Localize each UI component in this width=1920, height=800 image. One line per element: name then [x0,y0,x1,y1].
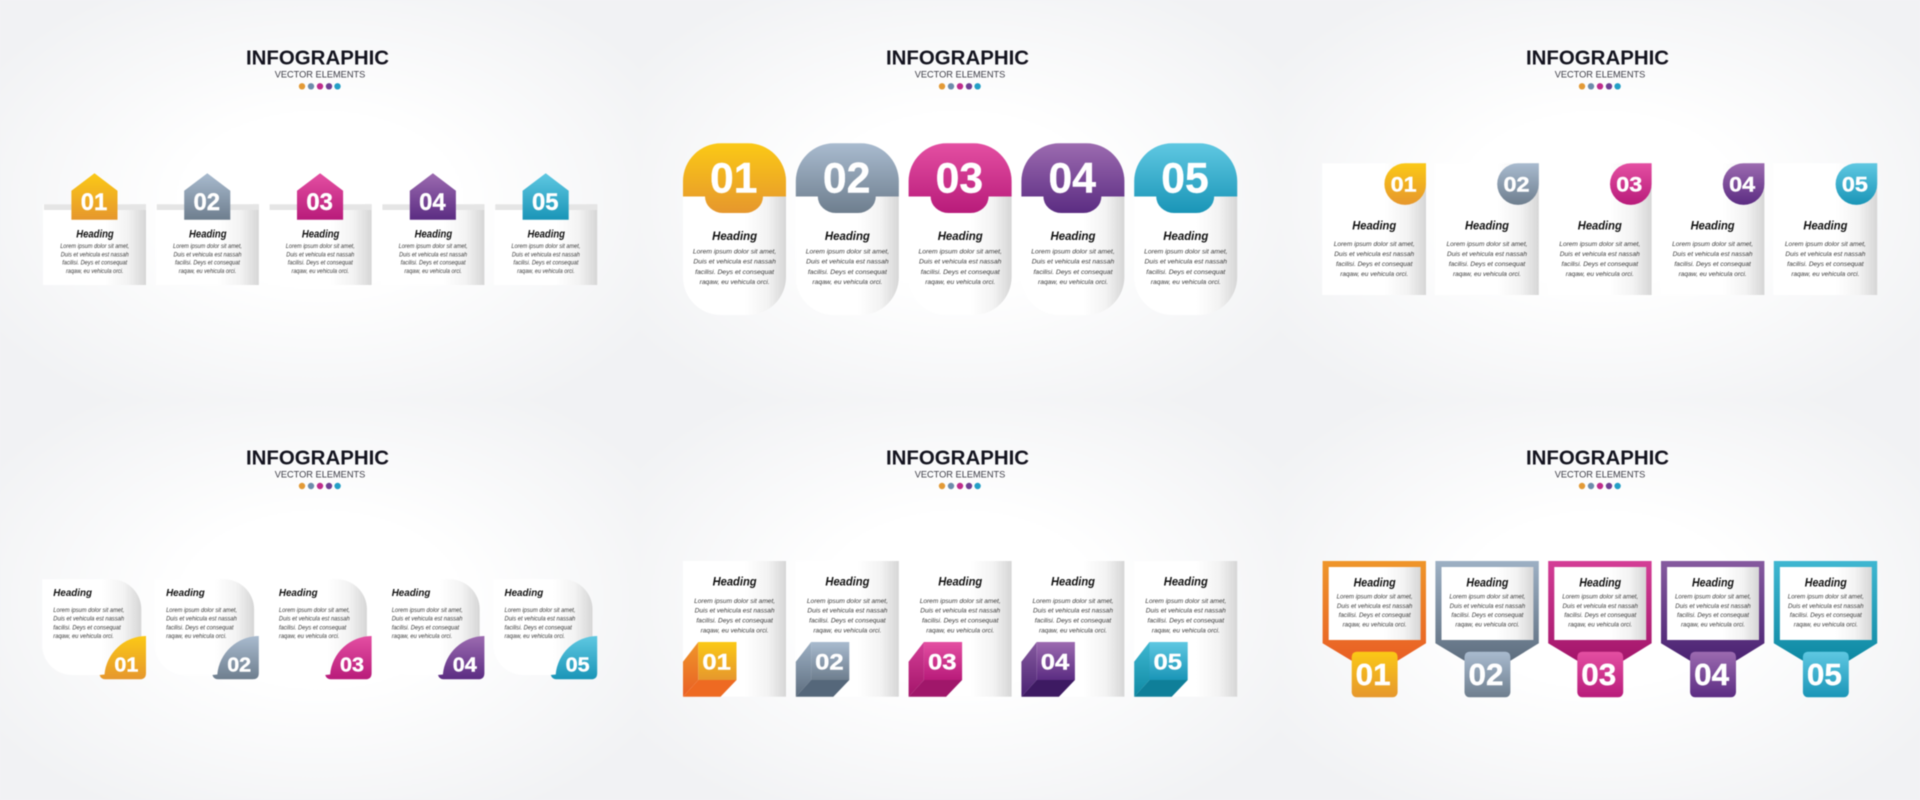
panel 4 card 01 [42,579,146,679]
panel 1 card 01: 01 [81,189,107,216]
panel 3 card 04 [1661,163,1764,295]
panel 6 card 01: Duis et vehicula est nassah [1337,603,1413,610]
panel 6 card 04: raqaw, eu vehicula orci. [1681,622,1745,628]
panel 3 card 02: raqaw, eu vehicula orci. [1453,271,1521,278]
panel 1 card 01 [43,173,146,285]
panel 4 card 03: facilisi. Deys et consequat [279,625,347,631]
panel 3 card 04: 04 [1729,173,1755,197]
panel 3 card 01: raqaw, eu vehicula orci. [1340,271,1408,278]
panel 1 card 02: 02 [194,189,220,216]
panel 5 card 02: 02 [815,649,844,674]
panel 2: rounded capsules [683,47,1237,315]
panel 6 card 03: facilisi. Deys et consequat [1564,612,1636,619]
panel 2 card 02: Lorem ipsum dolor sit amet, [806,248,889,255]
panel 3 card 01: Lorem ipsum dolor sit amet, [1334,241,1415,248]
panel 6 card 04: Lorem ipsum dolor sit amet, [1675,593,1751,600]
panel 3 card 03: facilisi. Deys et consequat [1562,261,1639,268]
panel 1 card 03: Heading [302,228,340,240]
panel 3 card 03 [1548,163,1652,295]
panel 2 card 05: raqaw, eu vehicula orci. [1151,279,1221,286]
panel 6 card 02: 02 [1468,658,1503,692]
panel 3 card 02: Heading [1465,218,1510,232]
panel 2 card 04: raqaw, eu vehicula orci. [1038,279,1108,286]
panel 2 card 03 [909,143,1012,315]
panel 6 card 02: raqaw, eu vehicula orci. [1455,622,1519,628]
panel 2 card 01: Duis et vehicula est nassah [693,258,776,266]
panel 4 card 04: raqaw, eu vehicula orci. [392,634,452,640]
panel 4 card 05: Lorem ipsum dolor sit amet, [505,608,576,614]
panel 3 card 05 [1773,163,1877,295]
panel 2 card 03: Lorem ipsum dolor sit amet, [918,248,1002,255]
panel 2 card 05 [1134,143,1237,315]
panel 4: leaf tags [42,447,597,679]
panel 6 card 02: Heading [1466,578,1508,590]
panel 1 card 01: raqaw, eu vehicula orci. [66,269,123,275]
panel 5 card 01 [683,561,786,697]
panel 1 card 01: Heading [76,228,114,240]
panel 6 card 02: Lorem ipsum dolor sit amet, [1449,593,1525,600]
panel 6 title: VECTOR ELEMENTS [1555,469,1645,480]
panel 4 card 05: facilisi. Deys et consequat [505,625,572,631]
panel 3 card 02: facilisi. Deys et consequat [1449,261,1526,268]
panel 4 title: INFOGRAPHIC [246,447,389,469]
panel 1 card 04: raqaw, eu vehicula orci. [404,269,462,275]
panel 2 card 02: Duis et vehicula est nassah [806,258,889,266]
panel 4 card 02: Duis et vehicula est nassah [166,617,238,623]
panel 6 card 04: 04 [1694,658,1729,692]
panel 1 card 02 [156,173,259,285]
panel 4 card 05: raqaw, eu vehicula orci. [505,634,565,640]
panel 4 card 05: Duis et vehicula est nassah [505,617,576,623]
panel 6 card 05: facilisi. Deys et consequat [1790,612,1862,619]
panel 3 card 04: Lorem ipsum dolor sit amet, [1672,241,1753,248]
panel 5 card 04: Duis et vehicula est nassah [1033,608,1113,614]
panel 4 card 03: raqaw, eu vehicula orci. [279,634,339,640]
panel 5 card 01: raqaw, eu vehicula orci. [701,628,769,634]
panel 5 card 04: Heading [1051,575,1096,589]
panel 5 card 05: facilisi. Deys et consequat [1148,618,1225,624]
panel 2 card 04: Duis et vehicula est nassah [1032,258,1114,266]
panel 2 card 01: facilisi. Deys et consequat [695,269,775,276]
panel 5 card 03: raqaw, eu vehicula orci. [926,628,994,634]
panel 5 card 03: Lorem ipsum dolor sit amet, [920,598,1001,605]
panel 4 card 01: 01 [114,654,138,677]
panel 2 card 04: Lorem ipsum dolor sit amet, [1031,248,1115,255]
panel 2 card 01 [683,143,786,315]
panel 1 title: VECTOR ELEMENTS [275,69,365,80]
panel 1 card 04: Lorem ipsum dolor sit amet, [399,244,468,250]
panel 1 title [246,47,389,90]
panel 6 card 01: raqaw, eu vehicula orci. [1343,622,1407,628]
panel 4 card 01: Lorem ipsum dolor sit amet, [53,608,124,614]
panel 6 title [1526,447,1669,489]
panel 4 card 02: Lorem ipsum dolor sit amet, [166,608,237,614]
panel 2 card 02: facilisi. Deys et consequat [808,269,888,276]
panel 2 card 05: Duis et vehicula est nassah [1145,258,1227,266]
panel 2 card 05: Heading [1163,229,1209,243]
panel 2 card 01: 01 [710,154,758,202]
panel 5 card 02: raqaw, eu vehicula orci. [813,628,882,634]
panel 5 card 02: Heading [825,575,870,589]
panel 4 card 02: Heading [166,587,205,599]
panel 2 card 02: 02 [823,154,870,202]
panel 2 card 03: facilisi. Deys et consequat [921,269,1001,276]
panel 5 card 05: Heading [1164,575,1208,589]
panel 2 card 05: 05 [1161,154,1209,202]
panel 3 card 05: 05 [1842,173,1868,197]
panel 4 card 02: facilisi. Deys et consequat [166,625,234,631]
panel 4 card 02 [155,579,259,679]
panel 2 card 04: facilisi. Deys et consequat [1033,269,1114,276]
panel 2 card 01: Lorem ipsum dolor sit amet, [693,248,776,255]
panel 5 card 03 [909,561,1012,697]
panel 6 card 05: raqaw, eu vehicula orci. [1794,622,1858,628]
panel 5 card 02: Lorem ipsum dolor sit amet, [807,598,888,605]
panel 6 card 01: 01 [1356,658,1391,692]
panel 4 card 03 [268,579,372,679]
panel 4 card 01: Duis et vehicula est nassah [53,617,125,623]
panel 2 card 03: raqaw, eu vehicula orci. [925,279,995,286]
panel 2 card 03: Heading [938,229,983,243]
panel 6 card 04: Heading [1692,578,1734,590]
panel 5 card 05: Duis et vehicula est nassah [1146,608,1226,614]
panel 6 card 04 [1661,561,1764,697]
panel 1 card 05: 05 [532,189,558,216]
panel 2 card 02: Heading [825,229,871,243]
panel 2 card 05: Lorem ipsum dolor sit amet, [1144,248,1228,255]
panel 1 card 01: Duis et vehicula est nassah [61,252,129,258]
panel 3 card 02: Lorem ipsum dolor sit amet, [1446,241,1528,248]
panel 5 card 05: 05 [1154,649,1182,674]
panel 2 card 03: 03 [936,154,983,202]
panel 6 card 01 [1323,561,1426,697]
panel 1 card 03: facilisi. Deys et consequat [288,261,353,267]
panel 5 card 01: 01 [702,649,731,674]
panel 4 card 02: raqaw, eu vehicula orci. [166,634,227,640]
panel 6 card 02: Duis et vehicula est nassah [1450,603,1526,610]
panel 3 card 05: Lorem ipsum dolor sit amet, [1785,241,1866,248]
panel 6: framed shields [1323,447,1877,697]
panel 6 card 03: Heading [1579,578,1621,590]
panel 4 card 03: Duis et vehicula est nassah [279,617,350,623]
panel 5 card 01: facilisi. Deys et consequat [696,618,774,624]
panel 1 card 04: Heading [415,228,452,240]
panel 5 card 03: Heading [938,575,983,589]
panel 6 card 04: facilisi. Deys et consequat [1677,612,1749,619]
panel 3 card 01: Duis et vehicula est nassah [1334,251,1415,258]
panel 1 card 03: raqaw, eu vehicula orci. [292,269,349,275]
panel 2 card 04: 04 [1048,154,1096,202]
panel 4 card 01: raqaw, eu vehicula orci. [53,634,114,640]
panel 1 card 01: facilisi. Deys et consequat [62,261,128,267]
panel 3 card 01: 01 [1391,173,1417,197]
panel 5 card 02: Duis et vehicula est nassah [807,608,888,614]
panel 5 card 01: Heading [713,575,757,589]
panel 5 card 03: Duis et vehicula est nassah [920,608,1001,614]
panel 6 card 03: 03 [1581,658,1616,692]
panel 5 card 04: 04 [1041,649,1070,674]
panel 2 card 02 [796,143,899,315]
panel 6 card 03 [1548,561,1652,697]
panel 1: pentagon tabs [43,47,597,285]
panel 6 card 01: facilisi. Deys et consequat [1339,612,1411,619]
panel 4 card 04: 04 [453,654,477,677]
panel 6 card 02: facilisi. Deys et consequat [1451,612,1524,619]
panel 1 card 03: Duis et vehicula est nassah [286,252,355,258]
panel 4 card 05 [493,579,597,679]
panel 5 title: INFOGRAPHIC [886,447,1029,469]
panel 4 card 05: Heading [505,587,544,599]
panel 2 card 01: raqaw, eu vehicula orci. [700,279,770,286]
panel 5 card 03: 03 [928,649,956,674]
panel 2 card 05: facilisi. Deys et consequat [1146,269,1226,276]
panel 1 card 02: raqaw, eu vehicula orci. [179,269,236,275]
panel 3 card 04: raqaw, eu vehicula orci. [1679,271,1747,278]
panel 3 card 02: Duis et vehicula est nassah [1447,251,1527,258]
panel 1 card 02: facilisi. Deys et consequat [175,261,240,267]
panel 1 card 04: Duis et vehicula est nassah [399,252,468,258]
panel 1 card 02: Duis et vehicula est nassah [174,252,242,258]
panel 3 card 02 [1435,163,1539,295]
panel 4 card 03: 03 [340,654,364,677]
panel 5 card 04 [1021,561,1124,697]
panel 3 title: INFOGRAPHIC [1526,47,1669,69]
panel 6 card 01: Heading [1354,578,1396,590]
panel 1 card 05: raqaw, eu vehicula orci. [517,269,575,275]
panel 1 card 03 [269,173,372,285]
panel 1 card 02: Heading [189,228,227,240]
panel 2 card 01: Heading [712,229,758,243]
panel 1 card 04 [381,173,484,285]
panel 3 card 04: Duis et vehicula est nassah [1673,251,1753,258]
panel 3 card 05: Heading [1803,218,1848,232]
panel 5: 3D blocks [683,447,1237,697]
panel 3 card 02: 02 [1503,173,1530,197]
panel 3 card 03: raqaw, eu vehicula orci. [1566,271,1634,278]
panel 3 card 03: 03 [1616,173,1642,197]
panel 4 card 04: facilisi. Deys et consequat [392,625,459,631]
panel 3 card 01: facilisi. Deys et consequat [1336,261,1414,268]
panel 5 card 05: raqaw, eu vehicula orci. [1152,628,1220,634]
panel 6 card 05: 05 [1807,658,1842,692]
panel 3 card 04: facilisi. Deys et consequat [1674,261,1752,268]
panel 3 card 03: Lorem ipsum dolor sit amet, [1559,241,1640,248]
panel 2 card 04 [1021,143,1124,315]
panel 1 card 01: Lorem ipsum dolor sit amet, [60,244,129,250]
panel 1 card 05: Lorem ipsum dolor sit amet, [511,244,580,250]
panel 1 card 03: 03 [306,189,333,216]
panel 2 title [886,47,1029,90]
panel 3 card 05: facilisi. Deys et consequat [1787,261,1865,268]
panel 6 card 01: Lorem ipsum dolor sit amet, [1337,593,1413,600]
panel 3 title: VECTOR ELEMENTS [1555,69,1645,80]
panel 4 card 01: Heading [53,587,93,599]
panel 4 card 04 [381,579,484,679]
panel 4 card 04: Lorem ipsum dolor sit amet, [392,608,463,614]
panel 4 title: VECTOR ELEMENTS [275,469,365,480]
panel 6 card 05: Duis et vehicula est nassah [1788,603,1864,610]
panel 5 card 03: facilisi. Deys et consequat [922,618,1000,624]
panel 2 title: INFOGRAPHIC [886,47,1029,69]
panel 4 title [246,447,389,489]
panel 5 card 05 [1134,561,1237,697]
panel 4 card 01: facilisi. Deys et consequat [53,625,121,631]
panel 5 card 04: Lorem ipsum dolor sit amet, [1032,598,1114,605]
panel 3 card 05: raqaw, eu vehicula orci. [1791,271,1860,278]
panel 1 card 02: Lorem ipsum dolor sit amet, [173,244,242,250]
panel 2 card 03: Duis et vehicula est nassah [919,258,1002,266]
panel 3 title [1526,47,1669,90]
panel 4 card 02: 02 [227,654,251,677]
panel 3 card 03: Heading [1578,218,1622,232]
panel 4 card 05: 05 [566,654,590,677]
panel 4 card 03: Heading [279,587,318,599]
panel 4 card 04: Duis et vehicula est nassah [392,617,463,623]
panel 3 card 03: Duis et vehicula est nassah [1560,251,1640,258]
panel 1 card 05 [494,173,597,285]
panel 5 card 04: raqaw, eu vehicula orci. [1039,628,1107,634]
panel 1 card 05: Duis et vehicula est nassah [512,252,581,258]
panel 6 card 05: Lorem ipsum dolor sit amet, [1788,593,1864,600]
panel 3 card 01: Heading [1352,218,1397,232]
panel 3 card 05: Duis et vehicula est nassah [1785,251,1866,258]
panel 6 card 02 [1435,561,1539,697]
panel 6 card 03: Lorem ipsum dolor sit amet, [1562,593,1638,600]
panel 1 card 04: 04 [419,189,446,216]
panel 6 card 03: raqaw, eu vehicula orci. [1568,622,1632,628]
panel 6 card 05 [1774,561,1877,697]
panel 6 card 04: Duis et vehicula est nassah [1675,603,1751,610]
panel 6 card 05: Heading [1805,578,1847,590]
panel 1 card 03: Lorem ipsum dolor sit amet, [286,244,355,250]
panel 6 card 03: Duis et vehicula est nassah [1562,603,1639,610]
panel 5 title [886,447,1029,489]
panel 5 card 05: Lorem ipsum dolor sit amet, [1145,598,1226,605]
panel 4 card 04: Heading [392,587,431,599]
panel 5 card 02 [796,561,899,697]
panel 5 card 04: facilisi. Deys et consequat [1035,618,1112,624]
panel 1 title: INFOGRAPHIC [246,47,389,69]
panel 1 card 04: facilisi. Deys et consequat [401,261,466,267]
panel 1 card 05: Heading [527,228,565,240]
panel 3 card 04: Heading [1691,218,1735,232]
panel 6 title: INFOGRAPHIC [1526,447,1669,469]
panel 5 card 01: Lorem ipsum dolor sit amet, [694,598,775,605]
panel 4 card 03: Lorem ipsum dolor sit amet, [279,608,350,614]
panel 2 card 02: raqaw, eu vehicula orci. [812,279,883,286]
panel 5 title: VECTOR ELEMENTS [915,469,1005,480]
panel 5 card 01: Duis et vehicula est nassah [695,608,775,614]
panel 1 card 05: facilisi. Deys et consequat [513,261,579,267]
panel 3: corner drops [1322,47,1877,295]
panel 2 title: VECTOR ELEMENTS [915,69,1005,80]
panel 3 card 01 [1322,163,1426,295]
panel 5 card 02: facilisi. Deys et consequat [809,618,887,624]
panel 2 card 04: Heading [1050,229,1096,243]
